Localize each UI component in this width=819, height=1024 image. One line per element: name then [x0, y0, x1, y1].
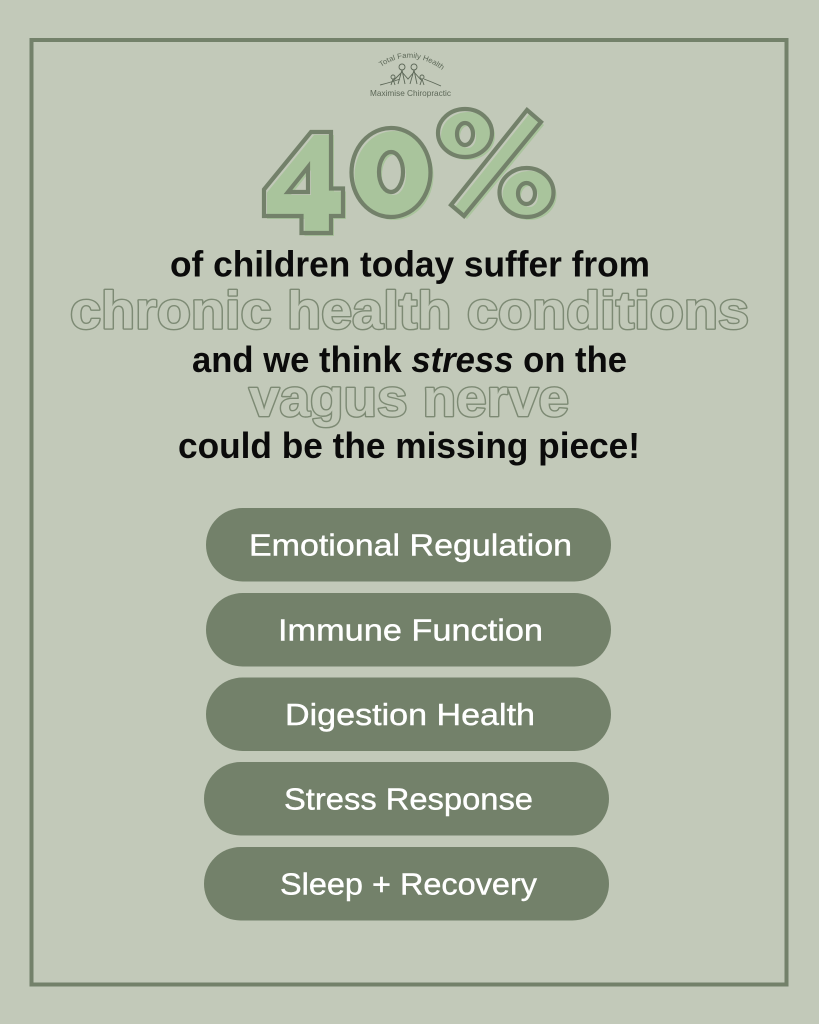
headline: 40%: [264, 109, 557, 236]
pill: Immune Function: [206, 593, 611, 666]
pill: Emotional Regulation: Emotional Regulation: [249, 528, 572, 562]
pill: Stress Response: Stress Response: [284, 782, 533, 816]
text: could be the missing piece!: could be the missing piece!: [178, 425, 640, 466]
pill: Digestion Health: [206, 678, 611, 751]
percent sign: [438, 109, 557, 220]
text: and we think stress on the: and we think stress on the: [192, 339, 627, 380]
outlined text: vagus nerve: vagus nerve: [249, 369, 569, 428]
pill: Sleep + Recovery: [204, 847, 609, 920]
pill: Immune Function: Immune Function: [278, 612, 543, 648]
logo: Total Family Health Maximise Chiropractic: Maximise Chiropractic: [370, 88, 452, 98]
logo: Total Family Health Maximise Chiropractic: Total Family Health: [378, 52, 444, 70]
pill: Emotional Regulation: [206, 508, 611, 582]
text: of children today suffer from: of children today suffer from: [170, 244, 650, 284]
logo: Total Family Health Maximise Chiropractic: [370, 52, 452, 98]
digit 0: [352, 128, 434, 220]
outlined text: chronic health conditions: chronic health conditions: [70, 282, 749, 340]
pill: Sleep + Recovery: Sleep + Recovery: [280, 866, 538, 902]
pill: Digestion Health: Digestion Health: [285, 697, 535, 732]
digit 4: [264, 132, 346, 236]
pill: Stress Response: [204, 762, 609, 836]
